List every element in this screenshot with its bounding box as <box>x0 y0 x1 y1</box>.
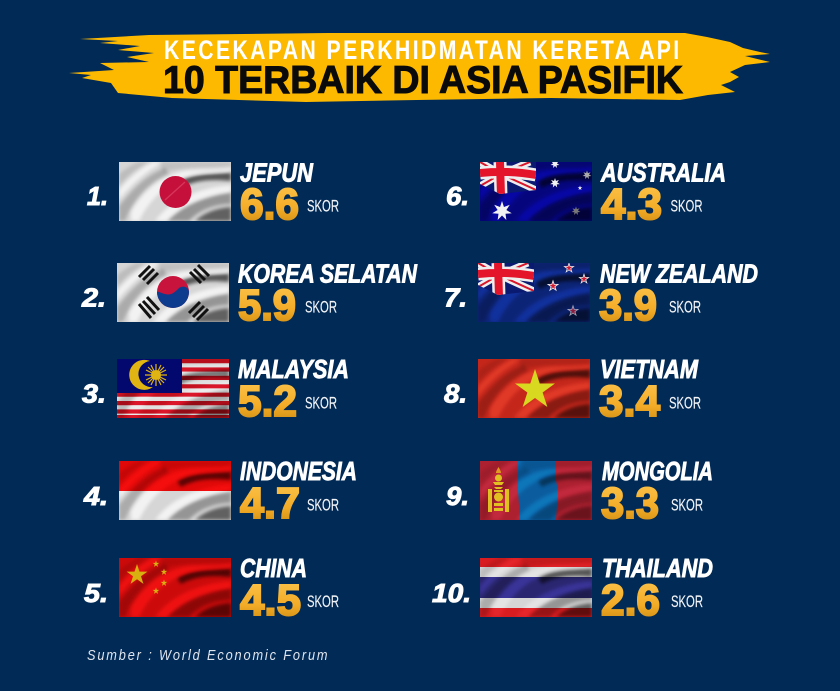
source note: Sumber : World Economic Forum <box>87 646 328 663</box>
score label: SKOR <box>671 496 703 514</box>
rank 6: 6. <box>446 181 469 211</box>
row 1: Jepun <box>86 162 339 221</box>
flag: Australia <box>480 160 592 221</box>
flag: Thailand <box>480 558 592 617</box>
row 6: Australia <box>446 162 725 221</box>
score: 4.5 <box>240 576 301 625</box>
name: KOREA SELATAN <box>238 258 418 288</box>
flag: China <box>119 558 231 617</box>
yellow brush stroke <box>69 33 770 102</box>
rank 4: 4. <box>83 481 108 511</box>
score: 4.3 <box>601 180 662 229</box>
row 3: Malaysia <box>82 359 348 418</box>
name: JEPUN <box>240 158 314 188</box>
score label: SKOR <box>307 496 339 514</box>
score label: SKOR <box>670 196 702 216</box>
score: 5.2 <box>238 377 297 426</box>
rank 7: 7. <box>444 282 467 312</box>
score: 6.6 <box>240 180 299 229</box>
rank 1: 1. <box>87 181 108 211</box>
flag: Malaysia <box>117 359 229 418</box>
name: CHINA <box>240 553 307 583</box>
name: MALAYSIA <box>238 354 349 384</box>
score: 5.9 <box>238 281 296 330</box>
score label: SKOR <box>307 196 339 216</box>
flag: New Zealand <box>478 263 590 322</box>
rank 2: 2. <box>81 282 106 312</box>
name: INDONESIA <box>240 456 357 486</box>
score label: SKOR <box>669 298 701 316</box>
name: VIETNAM <box>600 354 699 384</box>
score label: SKOR <box>669 394 701 412</box>
name: NEW ZEALAND <box>600 258 758 288</box>
score label: SKOR <box>305 394 337 412</box>
rank 3: 3. <box>82 378 106 408</box>
rank 8: 8. <box>444 378 467 408</box>
row 9: Mongolia <box>446 461 712 520</box>
rank 5: 5. <box>84 578 108 608</box>
row 2: Korea Selatan <box>80 263 418 322</box>
row 4: Indonesia <box>82 461 356 520</box>
score label: SKOR <box>671 592 703 611</box>
row 10: Thailand <box>432 558 713 617</box>
score: 3.3 <box>601 479 659 528</box>
score: 4.7 <box>240 479 300 528</box>
flag: Indonesia <box>119 461 231 520</box>
row 7: New Zealand <box>445 263 758 322</box>
flag: South Korea <box>117 263 229 322</box>
flag: Mongolia <box>480 461 592 520</box>
score: 3.9 <box>599 281 657 330</box>
score label: SKOR <box>307 592 339 611</box>
name: AUSTRALIA <box>600 158 726 188</box>
title line 1: KECEKAPAN PERKHIDMATAN KERETA API <box>164 36 679 66</box>
score: 3.4 <box>599 377 661 426</box>
row 5: China <box>84 558 339 617</box>
row 8: Vietnam <box>444 359 701 418</box>
flag: Vietnam <box>478 359 590 418</box>
flag: Japan <box>119 162 231 221</box>
name: THAILAND <box>602 553 713 583</box>
score label: SKOR <box>305 298 337 316</box>
name: MONGOLIA <box>602 456 713 486</box>
rank 9: 9. <box>446 481 469 511</box>
rank 10: 10. <box>432 578 471 608</box>
score: 2.6 <box>601 576 660 625</box>
title banner <box>69 33 770 102</box>
title line 2: 10 TERBAIK DI ASIA PASIFIK <box>163 59 683 102</box>
